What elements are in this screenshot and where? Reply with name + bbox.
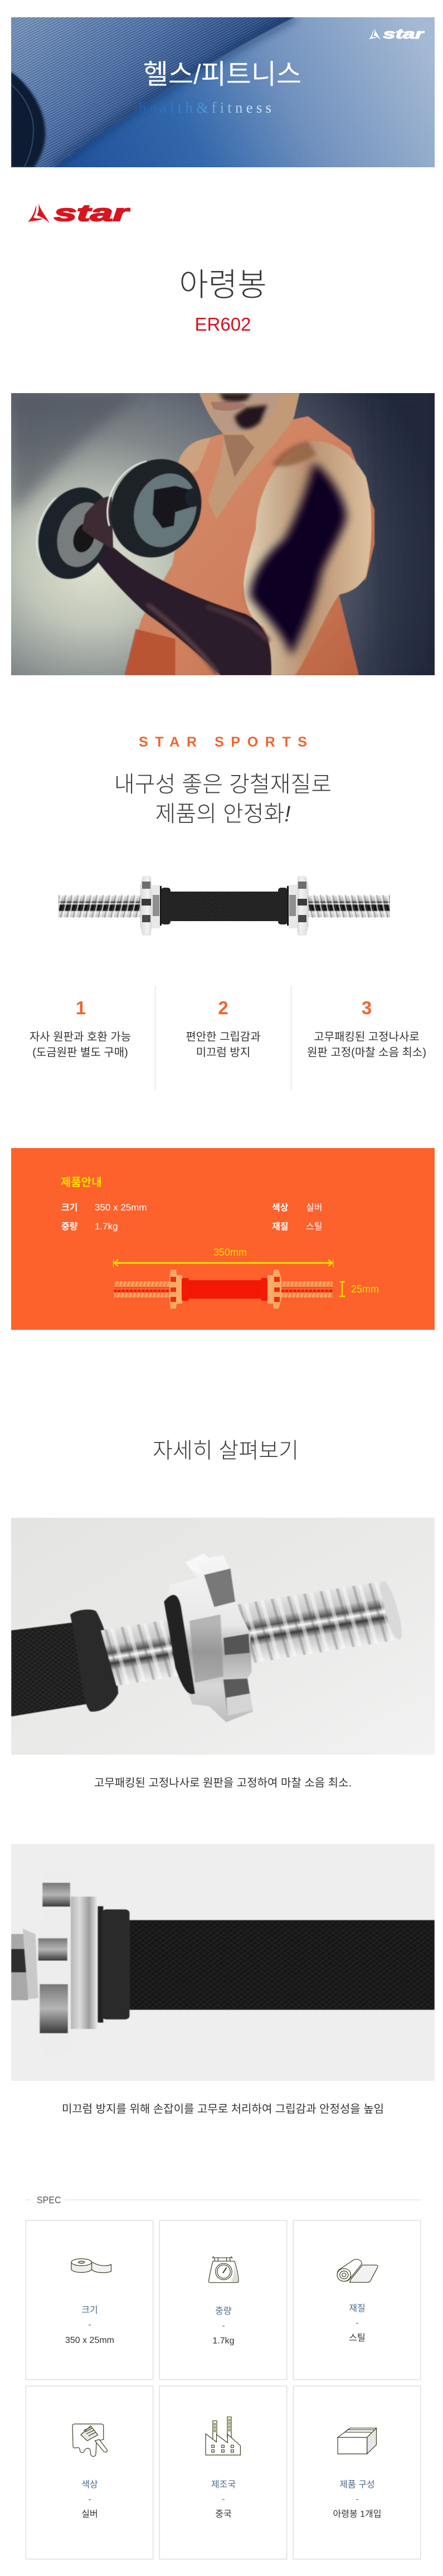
- panel heading: 제품안내: [61, 1176, 102, 1189]
- icon: paint brush: [72, 2423, 108, 2457]
- label: weight: 중량: [61, 1222, 77, 1232]
- model number: ER602: [195, 314, 251, 335]
- feature number 3: 3: [362, 998, 372, 1018]
- icon: cardboard box: [337, 2427, 377, 2454]
- dimension label: length: 350mm: [213, 1247, 247, 1258]
- material label: 재질: [349, 2304, 366, 2313]
- feature text 1: (도금원판 별도 구매): [32, 1047, 128, 1059]
- feature text 1: [30, 1031, 131, 1059]
- feature number 2: 2: [218, 998, 228, 1018]
- feature text 3: 고무패킹된 고정나사로: [314, 1031, 420, 1043]
- contents dash: -: [356, 2495, 359, 2504]
- weight label: 중량: [215, 2307, 232, 2316]
- weight value: 1.7kg: [212, 2336, 235, 2346]
- spec heading: SPEC: [37, 2195, 61, 2206]
- dimension label: diameter: 25mm: [351, 1284, 379, 1295]
- banner subtitle: health&fitness: [139, 99, 275, 116]
- contents label: 제품 구성: [339, 2480, 375, 2490]
- feature text 1: 자사 원판과 호환 가능: [30, 1031, 131, 1043]
- origin label: 제조국: [211, 2480, 236, 2490]
- material dash: -: [356, 2318, 359, 2328]
- label: material: 재질: [272, 1222, 288, 1232]
- label: size: 크기: [61, 1203, 77, 1213]
- headline: [114, 772, 332, 826]
- weight dash: -: [222, 2321, 225, 2331]
- spec card: country of manufacture: [159, 2386, 287, 2559]
- label: colour: 색상: [272, 1203, 288, 1213]
- colour value: 실버: [81, 2510, 98, 2519]
- detail photo 1: locking nut on threaded bar: [11, 1518, 435, 1755]
- spec card: weight: [159, 2220, 287, 2380]
- icon: kitchen scale: [208, 2256, 239, 2283]
- value: size: 350 x 25mm: [95, 1202, 147, 1213]
- feature text 2: 미끄럼 방지: [196, 1047, 250, 1059]
- feature column 3: [307, 998, 426, 1059]
- colour dash: -: [88, 2495, 91, 2504]
- detail caption 2: 미끄럼 방지를 위해 손잡이를 고무로 처리하여 그립감과 안정성을 높임: [62, 2103, 384, 2115]
- value: weight: 1.7kg: [95, 1221, 118, 1232]
- feature text 3: 원판 고정(마찰 소음 최소): [307, 1047, 426, 1059]
- feature text 2: [186, 1031, 261, 1059]
- material value: 스틸: [349, 2333, 366, 2343]
- spec card: size: [26, 2220, 153, 2380]
- size label: 크기: [81, 2306, 98, 2315]
- spec card: contents: [293, 2386, 421, 2559]
- red star logo: [28, 202, 130, 224]
- origin dash: -: [222, 2495, 225, 2504]
- feature text 2: 편안한 그립감과: [186, 1031, 261, 1043]
- headline: 내구성 좋은 강철재질로: [114, 772, 332, 797]
- banner photo: rolled blue mat: [11, 17, 435, 167]
- icon: factory: [205, 2417, 241, 2456]
- size value: 350 x 25mm: [65, 2336, 114, 2345]
- size dash: -: [88, 2320, 91, 2330]
- spec card: colour: [26, 2386, 153, 2559]
- icon: rolled mat: [337, 2259, 378, 2283]
- hero photo: man lifting a dumbbell: [11, 393, 435, 675]
- white star logo: [369, 28, 425, 40]
- dimension arrows and tinted dumbbell: [113, 1258, 345, 1309]
- panel: product information: [11, 1148, 435, 1330]
- product photo: dumbbell bar: [59, 877, 390, 936]
- feature number 1: 1: [76, 998, 86, 1018]
- icon: measuring tape: [71, 2258, 111, 2273]
- colour label: 색상: [81, 2480, 98, 2490]
- feature text 3: [307, 1031, 426, 1059]
- headline: 제품의 안정화!: [155, 802, 291, 826]
- feature column 2: [186, 998, 261, 1059]
- contents value: 아령봉 1개입: [333, 2510, 381, 2519]
- value: material: 스틸: [306, 1222, 322, 1232]
- detail caption 1: 고무패킹된 고정나사로 원판을 고정하여 마찰 소음 최소.: [94, 1777, 352, 1789]
- feature column 1: [30, 998, 131, 1059]
- product name: 아령봉: [179, 267, 267, 303]
- section heading: 자세히 살펴보기: [153, 1439, 299, 1463]
- banner title: 헬스/피트니스: [143, 60, 301, 90]
- detail photo 2: knurled rubber grip: [11, 1844, 435, 2081]
- section eyebrow: STAR SPORTS: STAR SPORTS: [139, 734, 314, 750]
- value: colour: 실버: [306, 1203, 322, 1213]
- spec card: material: [293, 2220, 421, 2380]
- origin value: 중국: [215, 2510, 232, 2519]
